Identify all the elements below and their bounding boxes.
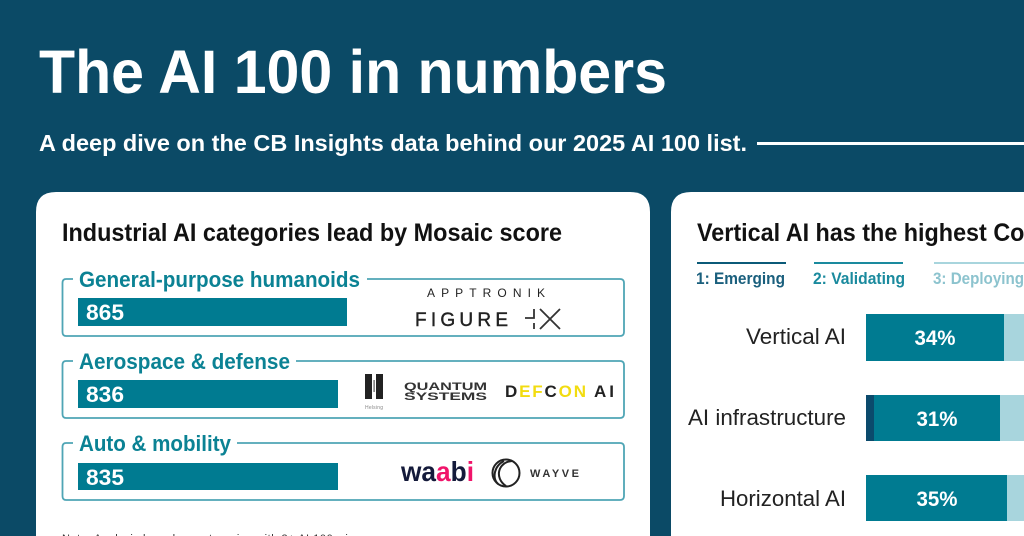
row: Horizontal AI xyxy=(720,475,1024,521)
category: General-purpose humanoids: 865 xyxy=(86,300,124,325)
row: Horizontal AI: Horizontal AI xyxy=(720,486,846,511)
legend xyxy=(696,262,1024,288)
logo: Apptronik: APPTRONIK xyxy=(427,286,545,300)
category: Aerospace & defense: Aerospace & defense xyxy=(79,349,290,374)
category: Aerospace & defense xyxy=(62,349,624,418)
category: Auto & mobility: 835 xyxy=(86,465,124,490)
legend: 1: Emerging xyxy=(696,270,785,288)
logo: Defcon AI: DEFCON xyxy=(505,382,586,401)
category: General-purpose humanoids: General-purpose humanoids xyxy=(79,267,360,292)
row: AI infrastructure: 31% xyxy=(916,408,958,431)
subtitle with rule: A deep dive on the CB Insights data behind our 2025 AI 100 list. xyxy=(39,130,747,156)
row: AI infrastructure xyxy=(688,395,1024,441)
category: Aerospace & defense: 836 xyxy=(86,382,124,407)
row: Horizontal AI: 35% xyxy=(916,488,958,511)
panel: Mosaic score xyxy=(36,192,650,536)
panel: Commercial Maturity xyxy=(671,192,1024,536)
legend: 2: Validating xyxy=(813,270,905,288)
row: Vertical AI: Vertical AI xyxy=(746,324,846,349)
row: Vertical AI: 34% xyxy=(914,327,956,350)
category: Auto & mobility: Auto & mobility xyxy=(79,431,231,456)
category: General-purpose humanoids xyxy=(62,267,624,336)
logo: Figure: FIGURE xyxy=(415,310,508,331)
logo: Helsing xyxy=(365,374,383,411)
logo: Wayve xyxy=(492,460,579,486)
logo: Waabi: waabi xyxy=(400,456,474,487)
logo: Quantum Systems: QUANTUM xyxy=(404,381,487,393)
row: AI infrastructure: AI infrastructure xyxy=(688,405,846,430)
logo: Wayve: WAYVE xyxy=(530,468,579,480)
title: The AI 100 in numbers xyxy=(39,38,667,106)
panel heading: Mosaic score: Industrial AI categories lead by Mosaic score xyxy=(62,219,562,247)
row: Vertical AI xyxy=(746,314,1024,361)
logo: Quantum Systems: SYSTEMS xyxy=(404,391,487,403)
logo: Defcon AI: AI xyxy=(594,382,614,401)
category: Auto & mobility xyxy=(62,431,624,500)
logo: Helsing: Helsing xyxy=(365,405,383,411)
logo: Quantum Systems xyxy=(404,381,487,403)
logo: 1X xyxy=(525,309,560,329)
